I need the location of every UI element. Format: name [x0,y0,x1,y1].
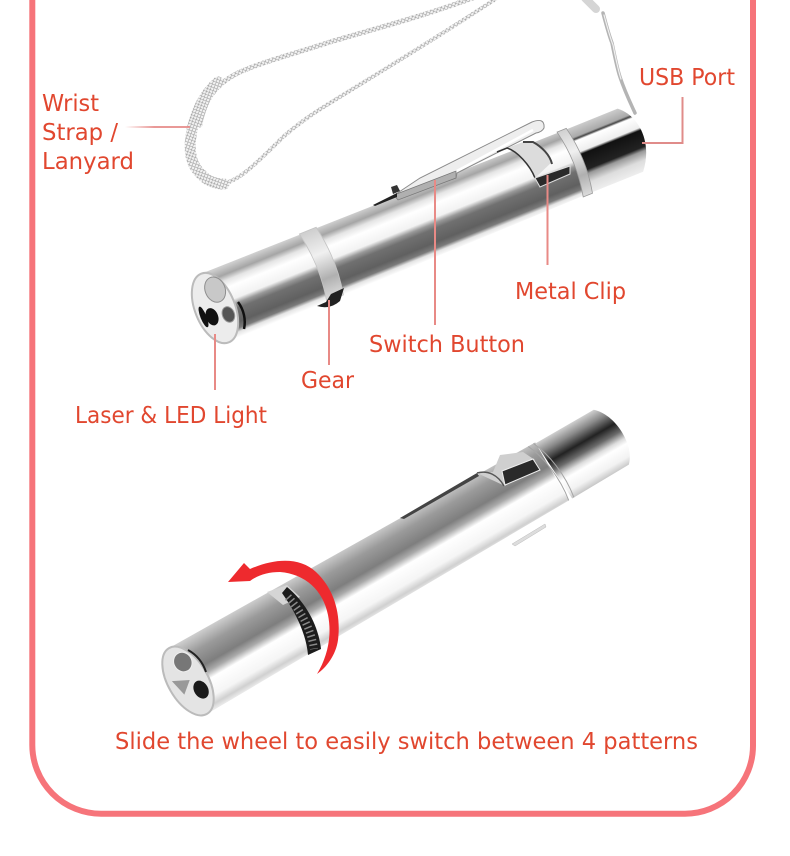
wheel [267,585,321,655]
caption: Slide the wheel to easily switch between 4 patterns [115,729,698,755]
leader: switch button [434,180,436,325]
label: wrist strap: Strap / [42,120,118,146]
collar [528,439,575,504]
label: gear: Gear [301,368,355,394]
front rim shadow [238,302,245,329]
label: USB port: USB Port [639,65,735,91]
label: laser and LED light: Laser & LED Light [75,403,267,429]
label: switch button: Switch Button [369,332,525,358]
pen rear cap [566,103,656,193]
pen barrel [201,128,590,342]
lower pen [152,398,640,724]
label: wrist strap: Lanyard [42,149,134,175]
gear wheel [317,288,344,307]
label: wrist strap: Wrist [42,91,99,117]
leader: metal clip [546,175,548,265]
leader: gear [328,300,330,365]
clip slot [497,142,570,187]
rear section [536,403,638,500]
icon: wrist strap lanyard [190,0,635,185]
leader: laser and LED [214,334,216,390]
lower pen clip slot [400,452,546,546]
front band [299,226,347,302]
front face [152,638,224,724]
upper pen: body [183,101,657,350]
front face [183,266,247,350]
label: metal clip: Metal Clip [515,279,626,305]
lower pen rim shadow [188,650,206,672]
arrow: rotation direction [228,561,339,674]
leader: wrist strap [125,126,190,128]
pen clip [373,120,544,206]
rear collar [557,127,596,197]
leader: USB port [642,97,682,143]
barrel [169,438,571,714]
